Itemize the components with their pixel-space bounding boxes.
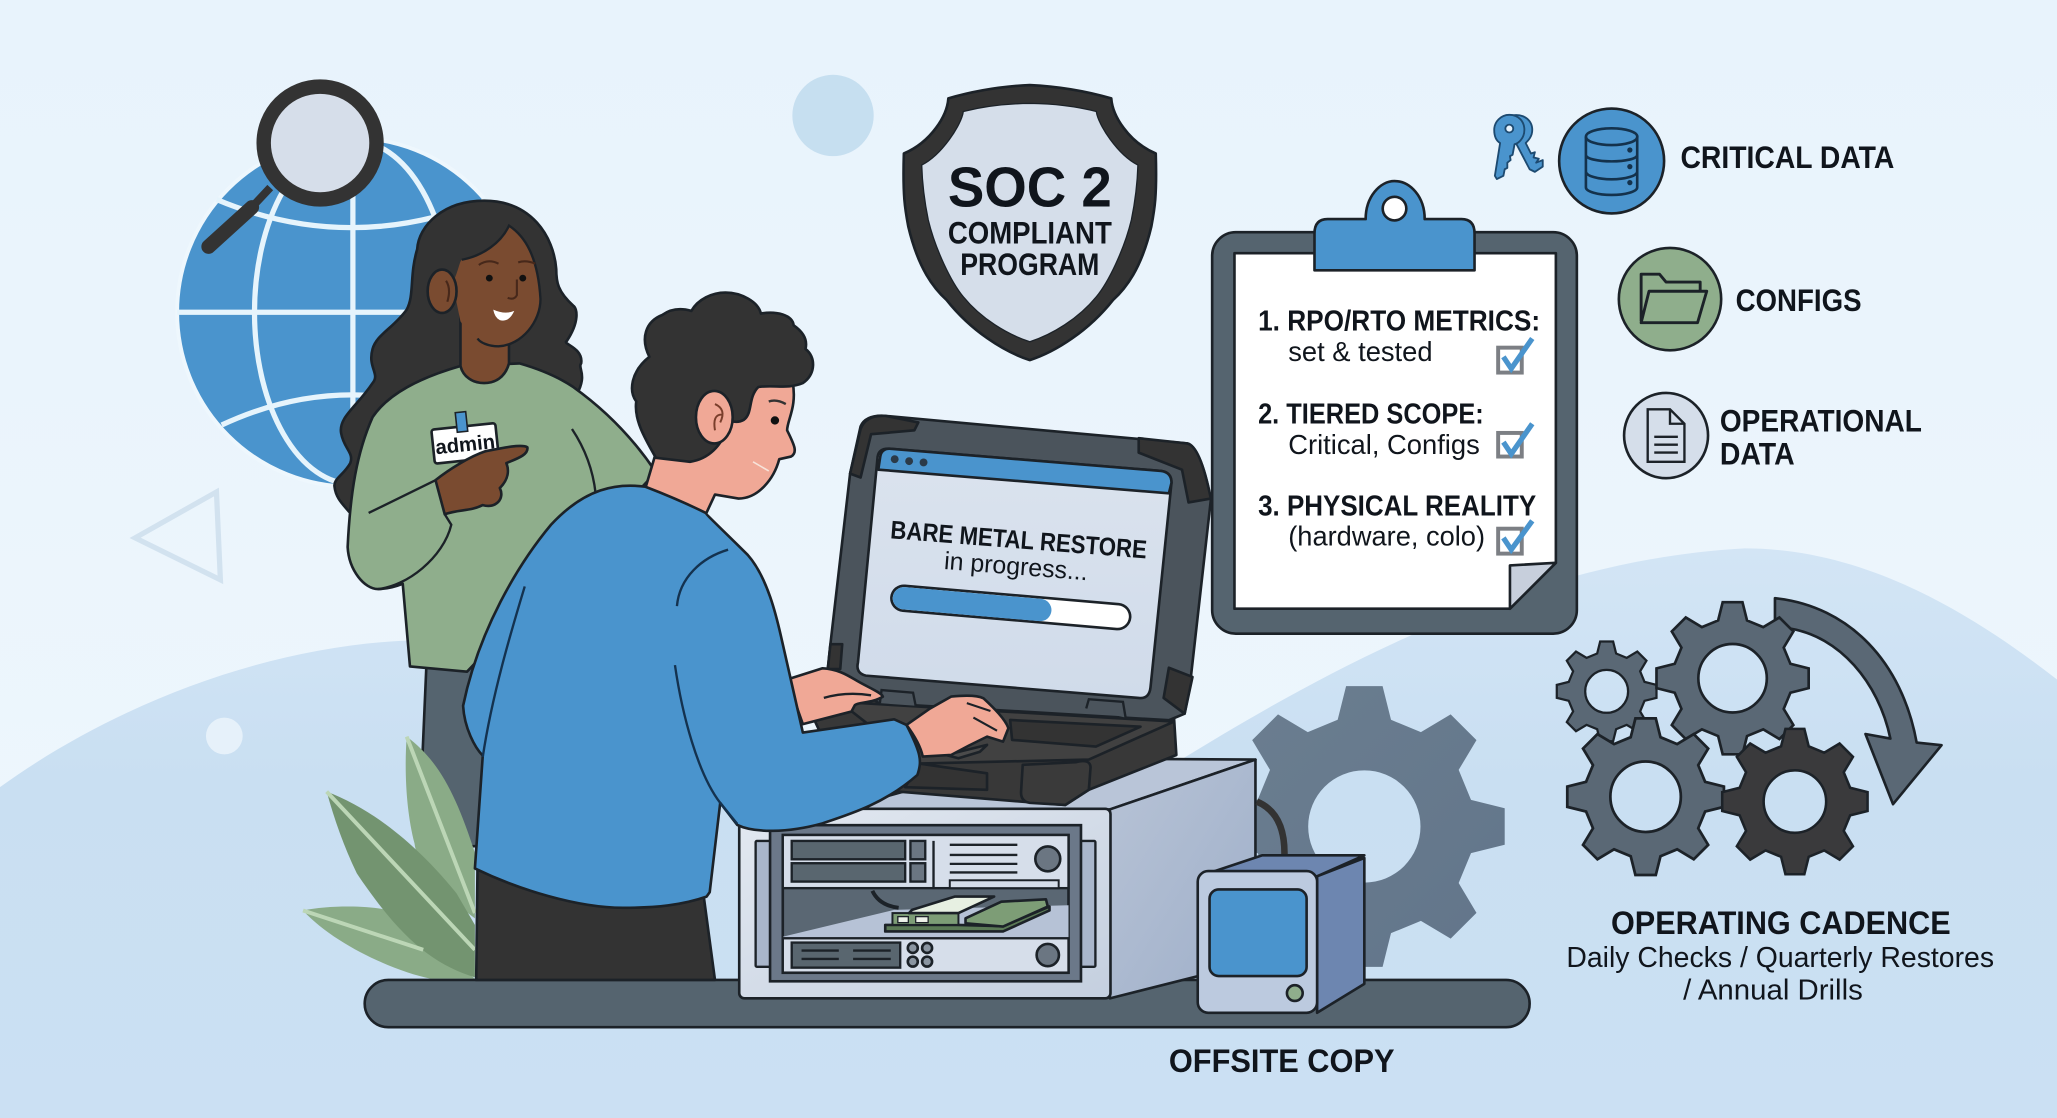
blue sweater bbox=[463, 486, 920, 908]
item 1: set & tested bbox=[1288, 336, 1433, 367]
shield badge bbox=[904, 85, 1156, 360]
item 3: 3. PHYSICAL REALITY bbox=[1258, 491, 1536, 523]
top unit bbox=[783, 835, 1069, 888]
desk bbox=[365, 980, 1530, 1027]
neck bbox=[460, 315, 509, 383]
window title bar bbox=[878, 449, 1171, 493]
label: critical data: CRITICAL DATA bbox=[1680, 140, 1894, 175]
paper bbox=[1234, 253, 1556, 609]
trackpad bbox=[946, 745, 987, 758]
left leaf bbox=[303, 906, 475, 979]
small gear bbox=[1557, 642, 1656, 741]
shield face bbox=[922, 103, 1138, 342]
label: operational data: OPERATIONAL bbox=[1720, 404, 1922, 439]
icon: folder bbox=[1619, 248, 1721, 350]
item 3 bbox=[1258, 491, 1536, 554]
window dots bbox=[891, 455, 899, 463]
back leaf bbox=[406, 737, 475, 918]
smile bbox=[493, 310, 514, 321]
lower left gear bbox=[1567, 718, 1724, 875]
icon: database bbox=[1559, 109, 1664, 213]
operating cadence text: Daily Checks / Quarterly Restores bbox=[1566, 942, 1994, 974]
clip bbox=[1314, 181, 1475, 270]
figure: man at laptop bbox=[463, 293, 1008, 980]
offsite copy device bbox=[1198, 802, 1364, 1013]
upper gear bbox=[1656, 602, 1809, 754]
open bay floor bbox=[783, 905, 1069, 938]
item 1 bbox=[1258, 306, 1540, 373]
sweater bbox=[348, 363, 656, 672]
label: operational data bbox=[1720, 404, 1922, 471]
offsite copy label: OFFSITE COPY bbox=[1169, 1042, 1395, 1079]
neck and face bbox=[645, 367, 795, 514]
item 2: Critical, Configs bbox=[1288, 429, 1480, 460]
admin name badge: admin bbox=[434, 431, 496, 459]
clipboard board bbox=[1212, 232, 1577, 634]
icon: magnifying glass bbox=[209, 87, 377, 247]
right hand bbox=[906, 696, 1008, 757]
sweater creases bbox=[483, 550, 737, 824]
icon: document bbox=[1624, 393, 1708, 478]
bottom unit bbox=[783, 938, 1069, 973]
laptop bbox=[803, 416, 1211, 805]
plant bbox=[303, 737, 475, 979]
hair bbox=[334, 201, 582, 512]
label: configs: CONFIGS bbox=[1736, 283, 1862, 318]
trousers bbox=[476, 866, 715, 980]
shield frame bbox=[904, 85, 1156, 360]
shield heading: SOC 2 bbox=[948, 156, 1112, 219]
front handle bbox=[905, 764, 987, 790]
sweater creases bbox=[369, 429, 596, 589]
left hand bbox=[787, 668, 883, 724]
leaf veins bbox=[303, 737, 475, 950]
shield line 1: COMPLIANT bbox=[948, 215, 1112, 250]
screen title: BARE METAL RESTORE bbox=[889, 516, 1148, 564]
cycle arrow bbox=[1775, 598, 1942, 804]
front bumper bbox=[1021, 761, 1091, 805]
ear bbox=[696, 391, 733, 443]
rack frame bbox=[770, 825, 1081, 981]
side brackets bbox=[756, 841, 773, 967]
item 2: 2. TIERED SCOPE: bbox=[1258, 399, 1484, 431]
panel: clipboard checklist bbox=[1212, 181, 1577, 634]
operating cadence text: / Annual Drills bbox=[1683, 975, 1863, 1007]
progress bar bbox=[904, 598, 1118, 617]
icon: operating cadence gears bbox=[1557, 598, 1942, 875]
cable bbox=[1257, 802, 1284, 859]
item 2 bbox=[1258, 399, 1532, 460]
device LED bbox=[1287, 985, 1303, 1001]
cable in bay bbox=[872, 891, 899, 908]
server rack bbox=[739, 758, 1255, 998]
decorative triangle bbox=[135, 492, 220, 580]
background gear bbox=[1224, 686, 1505, 967]
icon: globe bbox=[177, 138, 526, 487]
laptop base bbox=[803, 695, 1176, 805]
hair bbox=[632, 293, 813, 462]
icon: keys bbox=[1494, 115, 1543, 179]
deck surface bbox=[840, 702, 1174, 764]
keyboard well bbox=[1010, 720, 1141, 747]
device top face bbox=[1207, 855, 1364, 876]
laptop screen bbox=[857, 449, 1171, 698]
device front face bbox=[1198, 871, 1317, 1013]
lid bumpers bbox=[828, 416, 1211, 714]
device side face bbox=[1317, 858, 1364, 1013]
laptop lid bbox=[828, 416, 1211, 720]
eyebrows and nose bbox=[446, 261, 535, 302]
dark gear bbox=[1722, 729, 1868, 874]
pointing hand bbox=[436, 446, 527, 514]
decorative circle bbox=[792, 75, 874, 156]
decorative white dot bbox=[206, 718, 243, 754]
ear bbox=[428, 270, 457, 313]
server front face bbox=[739, 809, 1110, 998]
item 3: (hardware, colo) bbox=[1288, 521, 1485, 552]
operating cadence text: OPERATING CADENCE bbox=[1611, 904, 1951, 941]
screen subtitle: in progress... bbox=[943, 547, 1089, 586]
face bbox=[453, 226, 540, 346]
eye and brow bbox=[771, 416, 779, 425]
device screen bbox=[1210, 889, 1307, 976]
exposed drive boards bbox=[885, 897, 1049, 931]
trousers bbox=[421, 666, 488, 846]
server side face bbox=[1110, 760, 1255, 998]
shield line 2: PROGRAM bbox=[960, 247, 1099, 282]
eyes bbox=[486, 275, 493, 282]
server top face bbox=[840, 758, 1255, 809]
middle leaf bbox=[327, 792, 475, 977]
admin name badge bbox=[430, 409, 499, 464]
item 1: 1. RPO/RTO METRICS: bbox=[1258, 306, 1540, 338]
background hills bbox=[0, 548, 2057, 1118]
label: operational data: DATA bbox=[1720, 436, 1795, 471]
figure: woman with admin badge bbox=[334, 201, 656, 846]
page fold bbox=[1510, 563, 1556, 609]
operating cadence text bbox=[1566, 904, 1994, 1007]
hinge bands bbox=[880, 690, 1126, 718]
